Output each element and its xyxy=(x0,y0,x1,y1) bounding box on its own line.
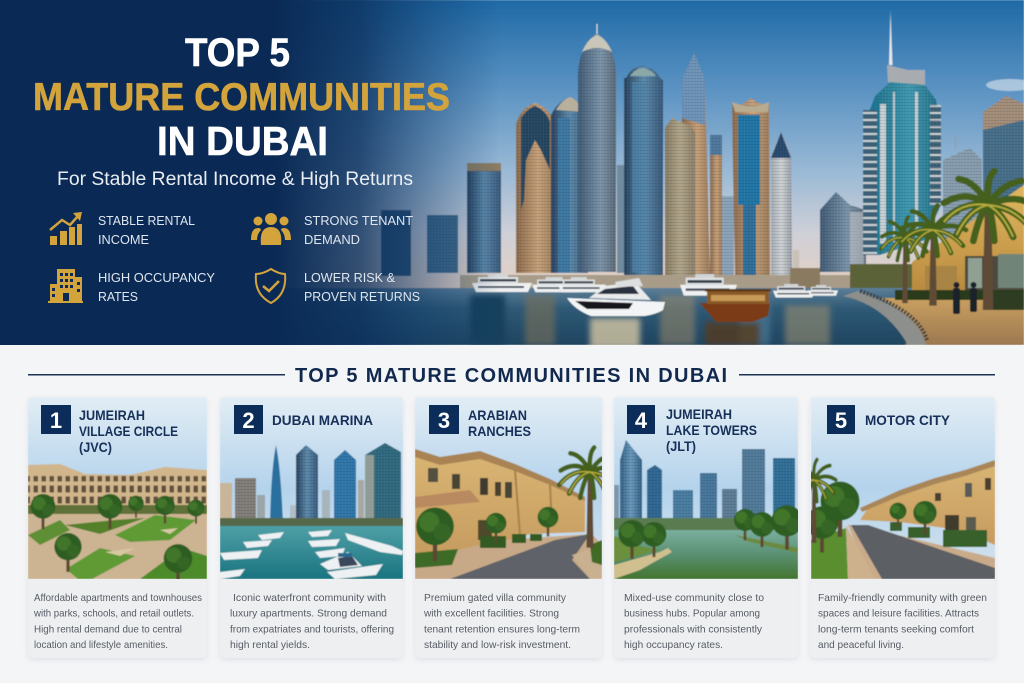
number badge 1: 1 xyxy=(50,408,62,433)
card title: RANCHES xyxy=(468,423,531,439)
card title: MOTOR CITY xyxy=(865,412,951,428)
card description: Mixed-use community close to xyxy=(624,593,764,604)
subtitle: For Stable Rental Income & High Returns xyxy=(57,169,413,190)
title: IN DUBAI xyxy=(157,118,328,164)
number badge 2 xyxy=(234,405,263,434)
benefit: stable rental income: INCOME xyxy=(98,232,149,247)
card image: marina towers and yachts xyxy=(220,397,403,579)
card description xyxy=(33,593,202,651)
icon: rising chart xyxy=(50,212,82,245)
card image: villas and street xyxy=(415,397,621,579)
card title xyxy=(79,407,178,455)
card description: high rental yields. xyxy=(230,640,310,651)
benefit: stable rental income: STABLE RENTAL xyxy=(98,213,195,228)
icon: shield check xyxy=(256,269,285,303)
right towers xyxy=(943,148,982,250)
card title: VILLAGE CIRCLE xyxy=(79,423,178,439)
icon: people xyxy=(251,213,291,245)
faint background towers xyxy=(381,210,411,276)
people xyxy=(953,282,977,314)
card description: with parks, schools, and retail outlets. xyxy=(33,608,194,620)
benefit: strong tenant demand: DEMAND xyxy=(304,232,360,247)
card description xyxy=(230,593,394,651)
benefit: high occupancy rates: RATES xyxy=(98,289,138,304)
card title: (JLT) xyxy=(666,438,696,454)
number badge 3: 3 xyxy=(438,408,450,433)
card description: stability and low-risk investment. xyxy=(424,640,571,651)
water xyxy=(291,287,913,345)
card description: high occupancy rates. xyxy=(624,640,723,651)
card 4: JLT xyxy=(614,397,803,660)
card description: Premium gated villa community xyxy=(424,593,567,604)
palms xyxy=(881,217,929,303)
card image: towers and lake xyxy=(614,397,803,579)
card description: High rental demand due to central xyxy=(34,624,182,636)
card description: with excellent facilities. Strong xyxy=(423,608,559,620)
card image: villas along road xyxy=(792,397,995,579)
yachts xyxy=(472,274,532,292)
card 1: JVC xyxy=(28,397,207,660)
marina towers xyxy=(467,163,501,273)
card 3: Arabian Ranches xyxy=(415,397,621,660)
card title: LAKE TOWERS xyxy=(666,422,757,438)
card description: and peaceful living. xyxy=(818,640,904,651)
title xyxy=(33,31,450,164)
card description: luxury apartments. Strong demand xyxy=(230,608,387,620)
card 2: Dubai Marina xyxy=(220,397,403,660)
card description xyxy=(818,593,987,651)
benefit: stable rental income xyxy=(50,212,195,247)
card title xyxy=(468,407,531,439)
card title xyxy=(666,406,757,454)
card title: ARABIAN xyxy=(468,407,527,423)
navy gradient overlay xyxy=(0,0,500,345)
card description xyxy=(423,593,580,651)
card description: Iconic waterfront community with xyxy=(233,593,386,604)
title: TOP 5 xyxy=(185,31,290,75)
hedge xyxy=(895,290,1024,300)
card image: JVC residences and gardens xyxy=(28,397,207,585)
card description: business hubs. Popular among xyxy=(624,608,760,620)
card description: tenant retention ensures long-term xyxy=(424,624,580,636)
number badge 3 xyxy=(429,405,459,434)
section heading: TOP 5 MATURE COMMUNITIES IN DUBAI xyxy=(295,365,727,387)
card description: Affordable apartments and townhouses xyxy=(34,593,202,604)
number badge 2: 2 xyxy=(242,408,255,433)
promenade wall and walkway xyxy=(880,298,1024,345)
benefit: strong tenant demand: STRONG TENANT xyxy=(304,213,413,228)
benefit: lower risk: PROVEN RETURNS xyxy=(304,289,420,304)
benefit: high occupancy rates xyxy=(48,269,215,304)
benefit: strong tenant demand xyxy=(251,213,413,247)
benefit: lower risk xyxy=(256,269,420,304)
card description: from expatriates and tourists, offering xyxy=(230,624,394,636)
wooden dhow xyxy=(700,289,771,322)
warm retail building xyxy=(912,185,1024,295)
benefit: high occupancy rates: HIGH OCCUPANCY xyxy=(98,270,215,285)
card description: professionals with consistently xyxy=(624,624,763,636)
card title: JUMEIRAH xyxy=(666,406,732,422)
card title: DUBAI MARINA xyxy=(272,412,373,428)
card title: (JVC) xyxy=(79,439,112,455)
skyline photo illustration xyxy=(291,0,1024,345)
number badge 1 xyxy=(41,405,71,434)
card description xyxy=(624,593,764,651)
number badge 4: 4 xyxy=(635,408,648,433)
number badge 4 xyxy=(627,405,655,434)
number badge 5 xyxy=(827,405,855,434)
card description: long-term tenants seeking comfort xyxy=(818,624,974,636)
card 5: Motor City xyxy=(792,397,995,660)
title: MATURE COMMUNITIES xyxy=(33,76,450,119)
icon: building xyxy=(48,269,83,303)
large teal tower with spire xyxy=(889,10,892,65)
waterfront podium line xyxy=(460,275,860,290)
card title: JUMEIRAH xyxy=(79,407,145,423)
benefit: lower risk: LOWER RISK & xyxy=(304,270,395,285)
number badge 5: 5 xyxy=(835,408,847,433)
card description: location and lifestyle amenities. xyxy=(34,640,168,651)
card description: Family-friendly community with green xyxy=(818,593,987,604)
hero banner xyxy=(0,0,1024,348)
card description: spaces and leisure facilities. Attracts xyxy=(818,608,979,620)
